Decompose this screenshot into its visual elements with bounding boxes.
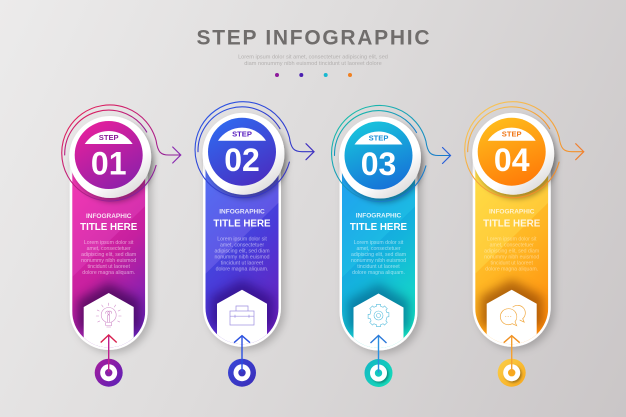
card text — [484, 237, 539, 273]
badge circle: STEP — [99, 133, 119, 142]
card text: Lorem ipsum dolor sit — [487, 237, 537, 243]
step colour dots — [275, 73, 352, 77]
card text: dolore magna aliquam. — [216, 267, 268, 273]
card text: tincidunt ut laoreet — [490, 261, 533, 267]
card text: adipiscing elit, sed diam — [214, 249, 270, 255]
panel: step 1 — [62, 105, 181, 387]
card text: amet, consectetuer — [220, 243, 264, 249]
card text: nonummy nibh euismod — [81, 258, 136, 264]
badge circle — [472, 113, 554, 195]
connector rings and arrow — [195, 102, 314, 198]
card text: tincidunt ut laoreet — [357, 264, 400, 270]
panel: step 4 — [465, 102, 584, 387]
card text: nonummy nibh euismod — [351, 258, 406, 264]
card text: Lorem ipsum dolor sit — [84, 240, 134, 246]
panel: step 3 — [332, 106, 450, 387]
title: STEP INFOGRAPHIC — [196, 26, 430, 50]
card heading: TITLE HERE — [213, 218, 271, 230]
badge circle: 04 — [494, 142, 530, 178]
card text: adipiscing elit, sed diam — [484, 249, 539, 255]
card heading: INFOGRAPHIC — [86, 213, 132, 220]
card text: amet, consectetuer — [87, 246, 131, 252]
card text: adipiscing elit, sed diam — [81, 252, 136, 258]
card text: nonummy nibh euismod — [214, 255, 270, 261]
badge circle: 03 — [361, 146, 396, 182]
badge circle: STEP — [369, 134, 388, 142]
card text: adipiscing elit, sed diam — [351, 252, 406, 258]
card text — [351, 240, 406, 276]
card text: nonummy nibh euismod — [484, 255, 539, 261]
card heading: TITLE HERE — [80, 222, 138, 233]
card text: tincidunt ut laoreet — [87, 264, 130, 270]
panel: step 2 — [195, 102, 314, 387]
badge circle: STEP — [502, 130, 522, 139]
card text: amet, consectetuer — [356, 246, 401, 252]
subtitle text — [238, 55, 388, 67]
stem arrow and node — [364, 336, 392, 387]
card text: amet, consectetuer — [490, 243, 534, 249]
badge circle: 01 — [91, 146, 126, 182]
card text: dolore magna aliquam. — [485, 267, 538, 273]
stem arrow and node — [228, 336, 256, 387]
connector rings and arrow — [332, 106, 450, 202]
icon: gear — [368, 304, 389, 327]
badge circle — [69, 116, 151, 198]
card heading — [80, 213, 138, 233]
badge circle — [339, 116, 421, 198]
card text — [81, 240, 136, 276]
icon: light bulb — [96, 303, 121, 327]
card heading: INFOGRAPHIC — [219, 209, 265, 216]
subtitle text: Lorem ipsum dolor sit amet, consectetuer adipiscing elit, sed — [238, 55, 388, 61]
card text: Lorem ipsum dolor sit — [354, 240, 404, 246]
subtitle text: diam nonummy nibh euismod tincidunt ut laoreet dolore — [244, 61, 382, 67]
card heading — [483, 209, 541, 230]
card text — [214, 237, 270, 273]
badge circle: 02 — [224, 142, 260, 178]
card heading: INFOGRAPHIC — [356, 213, 402, 220]
card heading: INFOGRAPHIC — [489, 209, 535, 216]
connector rings and arrow — [465, 102, 584, 198]
stem arrow and node — [498, 336, 526, 387]
badge circle — [202, 113, 284, 195]
card text: Lorem ipsum dolor sit — [217, 237, 267, 243]
card body — [70, 155, 148, 350]
icon: briefcase — [230, 306, 254, 325]
card heading — [350, 213, 408, 233]
card text: tincidunt ut laoreet — [221, 261, 264, 267]
card heading — [213, 209, 271, 230]
card body — [473, 152, 551, 347]
badge circle: STEP — [232, 130, 252, 139]
stem arrow and node — [95, 335, 123, 387]
card text: dolore magna aliquam. — [352, 270, 405, 276]
card text: dolore magna aliquam. — [82, 270, 135, 276]
connector rings and arrow — [62, 105, 181, 201]
card heading: TITLE HERE — [350, 222, 408, 233]
card heading: TITLE HERE — [483, 218, 541, 230]
card body — [203, 152, 281, 347]
card body — [340, 156, 418, 350]
icon: chat bubbles — [500, 305, 525, 326]
